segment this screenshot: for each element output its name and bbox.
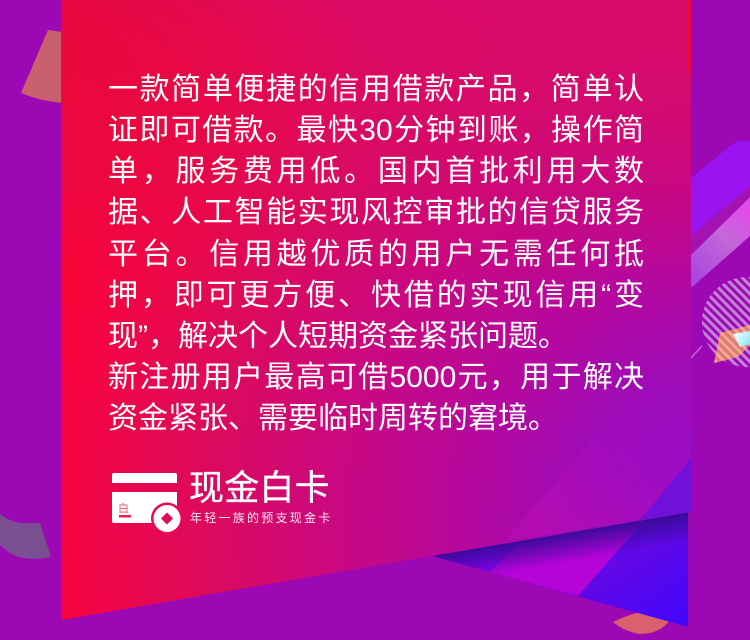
shape: hatched orange square	[714, 325, 750, 363]
line 3: 单，服务费用低。国内首批利用大数	[108, 155, 644, 188]
shape: white triangle	[733, 331, 750, 347]
shape: orange wedge bottom	[613, 610, 670, 634]
shape: hatched circle	[702, 277, 750, 367]
line 7: 现”，解决个人短期资金紧张问题。	[108, 320, 568, 353]
panel: back fold	[432, 500, 688, 627]
shape: purple rounded band right	[691, 141, 750, 236]
text block: product description	[108, 73, 644, 435]
line 6: 押，即可更方便、快借的实现信用“变	[108, 279, 644, 312]
shape: dark band right	[691, 186, 750, 255]
line 4: 据、人工智能实现风控审批的信贷服务	[108, 196, 644, 229]
line 9: 资金紧张、需要临时周转的窘境。	[108, 402, 558, 435]
logo tagline: 年轻一族的预支现金卡	[190, 511, 333, 525]
icon: card with coin	[112, 473, 180, 532]
shape: thin diagonal line	[691, 346, 702, 358]
line 2: 证即可借款。最快30分钟到账，操作简	[108, 114, 644, 147]
line 8: 新注册用户最高可借5000元，用于解决	[108, 361, 644, 394]
icon: card with coin: 白	[118, 501, 129, 515]
line 1: 一款简单便捷的信用借款产品，简单认	[108, 73, 644, 106]
shape: grey wedge bottom left	[0, 514, 51, 559]
logo name: 现金白卡	[189, 469, 330, 508]
logo: 现金白卡	[112, 469, 333, 532]
line 5: 平台。信用越优质的用户无需任何抵	[108, 238, 644, 271]
shape: light gradient band right	[691, 197, 750, 287]
shape: salmon wedge top left	[21, 30, 62, 103]
